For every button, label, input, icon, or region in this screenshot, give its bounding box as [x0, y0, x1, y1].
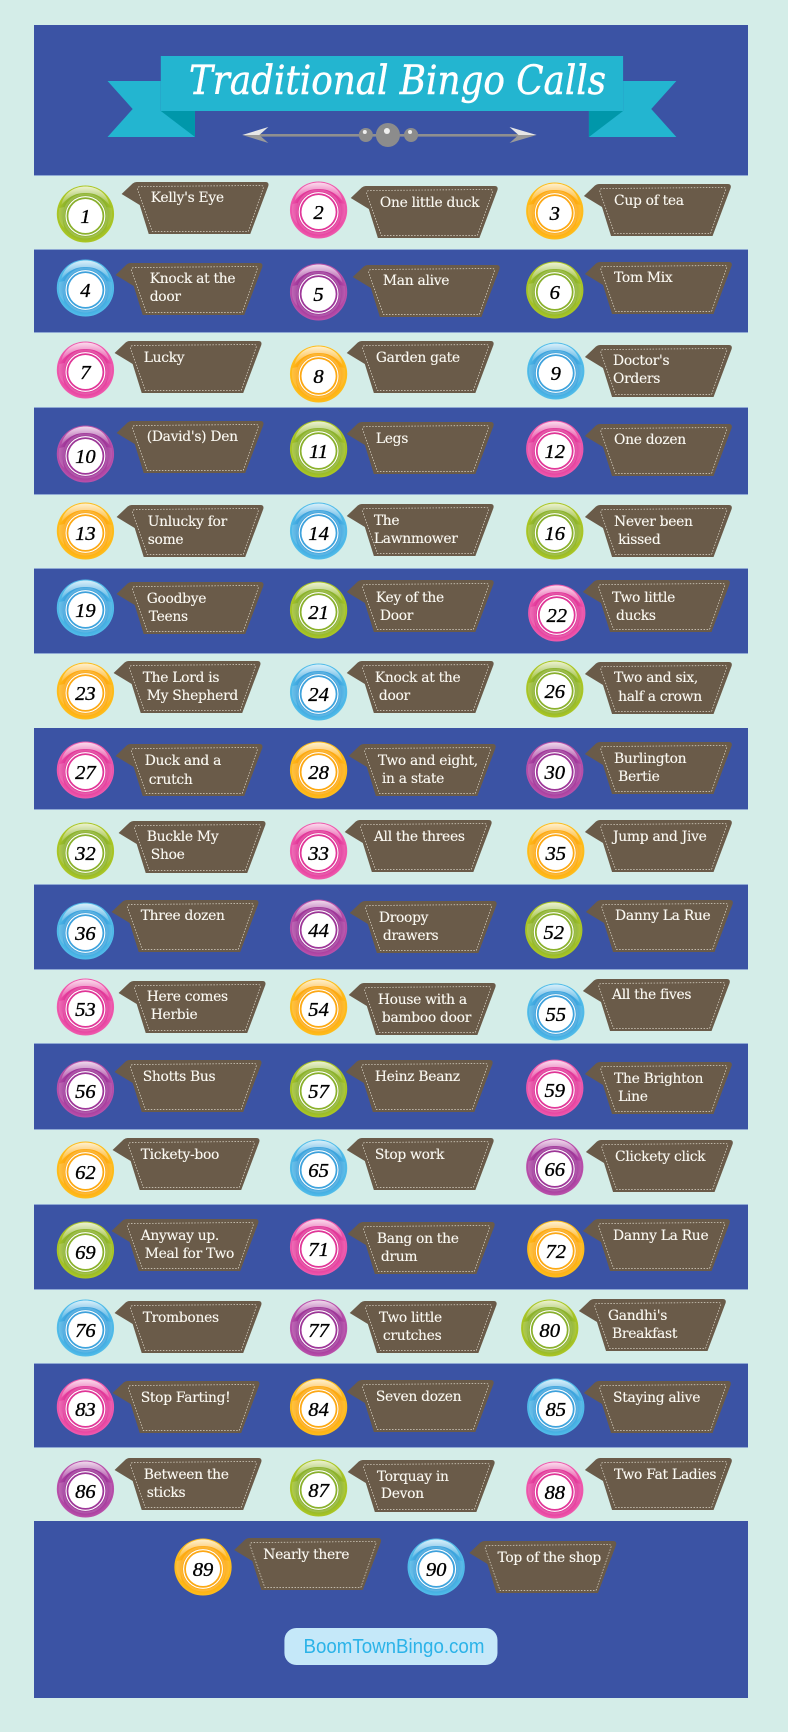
- call 53: Herbie: [151, 1007, 197, 1023]
- call 62: 62: [75, 1162, 96, 1184]
- call 23: My Shepherd: [147, 688, 238, 704]
- call 21: Door: [380, 608, 414, 624]
- call 27: [57, 742, 263, 798]
- call 12: [526, 420, 732, 478]
- call 3: 3: [549, 203, 560, 225]
- call 30: Burlington: [614, 751, 687, 767]
- call 86: Between the: [144, 1467, 229, 1483]
- call 21: 21: [308, 602, 329, 624]
- call 55: 55: [545, 1004, 566, 1026]
- call 9: 9: [551, 363, 561, 385]
- call 72: [527, 1219, 730, 1278]
- call 2: One little duck: [380, 195, 480, 211]
- call 28: Two and eight,: [378, 753, 478, 769]
- call 54: [290, 978, 496, 1036]
- call 22: [528, 580, 730, 642]
- call 1: Kelly's Eye: [151, 190, 224, 206]
- call 10: 10: [75, 446, 96, 468]
- call 69: Meal for Two: [145, 1246, 234, 1262]
- call 54: House with a: [378, 992, 467, 1008]
- call 36: 36: [74, 923, 96, 945]
- call 52: [525, 900, 733, 958]
- call 6: Tom Mix: [614, 270, 673, 286]
- arrow ornament: [242, 123, 537, 147]
- call 21: Key of the: [376, 590, 444, 606]
- call 62: [57, 1138, 259, 1198]
- call 28: [290, 742, 496, 798]
- call 85: [527, 1378, 731, 1436]
- call 65: 65: [308, 1160, 329, 1182]
- call 3: Cup of tea: [614, 193, 684, 209]
- call 27: 27: [75, 762, 96, 784]
- call 71: Bang on the: [377, 1231, 459, 1247]
- call 24: door: [379, 688, 411, 704]
- call 13: [57, 502, 264, 560]
- call 59: The Brighton: [614, 1071, 704, 1087]
- call 69: Anyway up.: [140, 1228, 219, 1244]
- call 80: 80: [539, 1320, 561, 1342]
- call 53: [57, 978, 266, 1036]
- call 89: Nearly there: [263, 1547, 349, 1563]
- call 86: sticks: [147, 1485, 186, 1501]
- call 33: All the threes: [373, 829, 465, 845]
- call 84: 84: [308, 1399, 329, 1421]
- call 30: Bertie: [618, 769, 660, 785]
- call 59: Line: [618, 1089, 648, 1105]
- call 23: 23: [75, 683, 96, 705]
- call 19: Teens: [149, 609, 188, 625]
- call 26: 26: [544, 681, 566, 703]
- call 33: [290, 820, 492, 880]
- call 90: 90: [426, 1559, 447, 1581]
- call 77: 77: [308, 1320, 330, 1342]
- title ribbon: [108, 56, 676, 137]
- call 28: 28: [308, 762, 330, 784]
- call 32: Shoe: [151, 847, 185, 863]
- call 6: 6: [550, 282, 561, 304]
- call 14: [290, 502, 494, 560]
- call 11: Legs: [376, 431, 408, 447]
- call 87: Torquay in: [377, 1469, 449, 1485]
- call 6: [526, 262, 732, 318]
- call 30: [526, 742, 732, 798]
- call 26: Two and six,: [614, 670, 698, 686]
- call 71: drum: [381, 1249, 417, 1265]
- website badge: BoomTownBingo.com: [304, 1636, 484, 1658]
- call 23: The Lord is: [143, 670, 219, 686]
- infographic content: [57, 56, 733, 1665]
- call 71: [290, 1218, 495, 1276]
- call 13: Unlucky for: [148, 514, 228, 530]
- call 44: Droopy: [379, 910, 429, 926]
- call 28: in a state: [382, 771, 444, 787]
- call 65: Stop work: [375, 1147, 445, 1163]
- call 8: [290, 341, 494, 402]
- call 44: 44: [308, 920, 329, 942]
- call 24: [290, 661, 494, 720]
- call 54: bamboo door: [382, 1010, 472, 1026]
- call 83: [57, 1378, 259, 1436]
- call 89: 89: [193, 1559, 213, 1581]
- call 88: Two Fat Ladies: [614, 1467, 716, 1483]
- call 26: [526, 660, 732, 718]
- call 76: [57, 1300, 262, 1356]
- call 13: 13: [75, 523, 96, 545]
- call 12: 12: [544, 441, 565, 463]
- call 14: 14: [308, 523, 329, 545]
- call 7: Lucky: [144, 350, 185, 366]
- call 16: Never been: [614, 514, 693, 530]
- call 84: [290, 1378, 494, 1436]
- call 76: Trombones: [143, 1310, 219, 1326]
- call 22: ducks: [616, 608, 656, 624]
- call 9: [527, 342, 732, 400]
- call 56: [57, 1060, 262, 1118]
- call 90: Top of the shop: [497, 1550, 601, 1566]
- call 59: 59: [544, 1080, 565, 1102]
- call 84: Seven dozen: [376, 1389, 462, 1405]
- call 69: 69: [75, 1242, 96, 1264]
- call 44: drawers: [383, 928, 439, 944]
- call 27: Duck and a: [145, 753, 221, 769]
- call 21: [290, 580, 494, 638]
- call 10: (David's) Den: [147, 429, 238, 445]
- call 72: Danny La Rue: [613, 1228, 708, 1244]
- call 13: some: [148, 532, 183, 548]
- call 5: 5: [313, 284, 324, 306]
- call 90: [408, 1538, 616, 1596]
- call 85: 85: [545, 1399, 566, 1421]
- call 10: [57, 421, 264, 482]
- call 76: 76: [75, 1320, 96, 1342]
- call 19: Goodbye: [147, 591, 206, 607]
- call 52: Danny La Rue: [615, 908, 710, 924]
- call 4: [57, 260, 263, 316]
- call 77: crutches: [383, 1328, 442, 1344]
- call 86: 86: [75, 1481, 96, 1503]
- call 16: kissed: [618, 532, 661, 548]
- call 80: Gandhi's: [608, 1308, 667, 1324]
- call 87: 87: [308, 1480, 330, 1502]
- call 8: 8: [313, 366, 324, 388]
- call 57: [290, 1060, 493, 1118]
- call 33: 33: [307, 843, 329, 865]
- call 89: [174, 1538, 381, 1596]
- call 85: Staying alive: [613, 1390, 700, 1406]
- call 1: 1: [80, 206, 91, 228]
- call 66: Clickety click: [615, 1149, 706, 1165]
- call 57: 57: [308, 1081, 330, 1103]
- call 16: [526, 502, 732, 560]
- call 54: 54: [308, 999, 329, 1021]
- call 12: One dozen: [614, 432, 686, 448]
- call 32: 32: [74, 843, 96, 865]
- call 80: [521, 1299, 726, 1356]
- call 4: Knock at the: [150, 271, 235, 287]
- call 11: 11: [309, 441, 328, 463]
- row bands: [34, 249, 748, 1698]
- title: Traditional Bingo Calls: [189, 58, 606, 104]
- call 86: [57, 1458, 262, 1518]
- call 69: [57, 1219, 258, 1278]
- call 36: Three dozen: [141, 908, 225, 924]
- header band: [34, 25, 748, 175]
- call 2: 2: [313, 202, 324, 224]
- call 62: Tickety-boo: [141, 1147, 219, 1163]
- call 87: [290, 1460, 495, 1516]
- call 5: [290, 264, 500, 320]
- call 44: [290, 900, 497, 956]
- call 2: [290, 182, 498, 238]
- call 9: Orders: [613, 371, 660, 387]
- call 23: [57, 661, 260, 720]
- call 24: 24: [308, 684, 329, 706]
- call 57: Heinz Beanz: [375, 1069, 460, 1085]
- call 22: Two little: [612, 590, 675, 606]
- call 53: Here comes: [147, 989, 228, 1005]
- call 71: 71: [308, 1239, 329, 1261]
- call 55: All the fives: [611, 987, 691, 1003]
- call 8: Garden gate: [376, 350, 460, 366]
- call 32: Buckle My: [147, 829, 219, 845]
- call 87: Devon: [381, 1486, 424, 1502]
- call 24: Knock at the: [375, 670, 461, 686]
- call 80: Breakfast: [612, 1326, 678, 1342]
- call 36: [57, 900, 258, 960]
- call 53: 53: [75, 999, 96, 1021]
- call 27: crutch: [149, 772, 193, 788]
- call 32: [57, 821, 266, 880]
- call 14: Lawnmower: [374, 531, 458, 547]
- call 7: [57, 341, 262, 398]
- call 88: [526, 1458, 732, 1518]
- call 83: Stop Farting!: [141, 1390, 230, 1406]
- call 35: Jump and Jive: [611, 829, 707, 845]
- call 72: 72: [545, 1241, 566, 1263]
- call 1: [57, 182, 269, 242]
- call 4: 4: [80, 280, 91, 302]
- call 22: 22: [546, 605, 567, 627]
- call 5: Man alive: [383, 273, 449, 289]
- call 26: half a crown: [618, 689, 702, 705]
- call 66: 66: [544, 1159, 566, 1181]
- call 88: 88: [544, 1482, 566, 1504]
- call 56: Shotts Bus: [143, 1069, 216, 1085]
- call 83: 83: [75, 1399, 96, 1421]
- call 4: door: [150, 289, 181, 305]
- call 77: Two little: [379, 1310, 442, 1326]
- call 66: [526, 1138, 733, 1196]
- call 52: 52: [543, 922, 564, 944]
- call 56: 56: [75, 1081, 96, 1103]
- call 9: Doctor's: [613, 353, 670, 369]
- call 30: 30: [543, 762, 566, 784]
- call 14: The: [374, 513, 399, 529]
- call 7: 7: [80, 362, 91, 384]
- call 55: [527, 979, 730, 1040]
- call 19: 19: [75, 600, 96, 622]
- website badge: [284, 1628, 497, 1665]
- call 77: [290, 1300, 497, 1356]
- call 65: [290, 1138, 494, 1196]
- call 59: [526, 1060, 732, 1116]
- call 35: [527, 820, 732, 880]
- call 19: [57, 580, 264, 636]
- call 3: [526, 182, 731, 240]
- call 16: 16: [544, 523, 566, 545]
- call 11: [290, 420, 494, 478]
- call 35: 35: [544, 843, 566, 865]
